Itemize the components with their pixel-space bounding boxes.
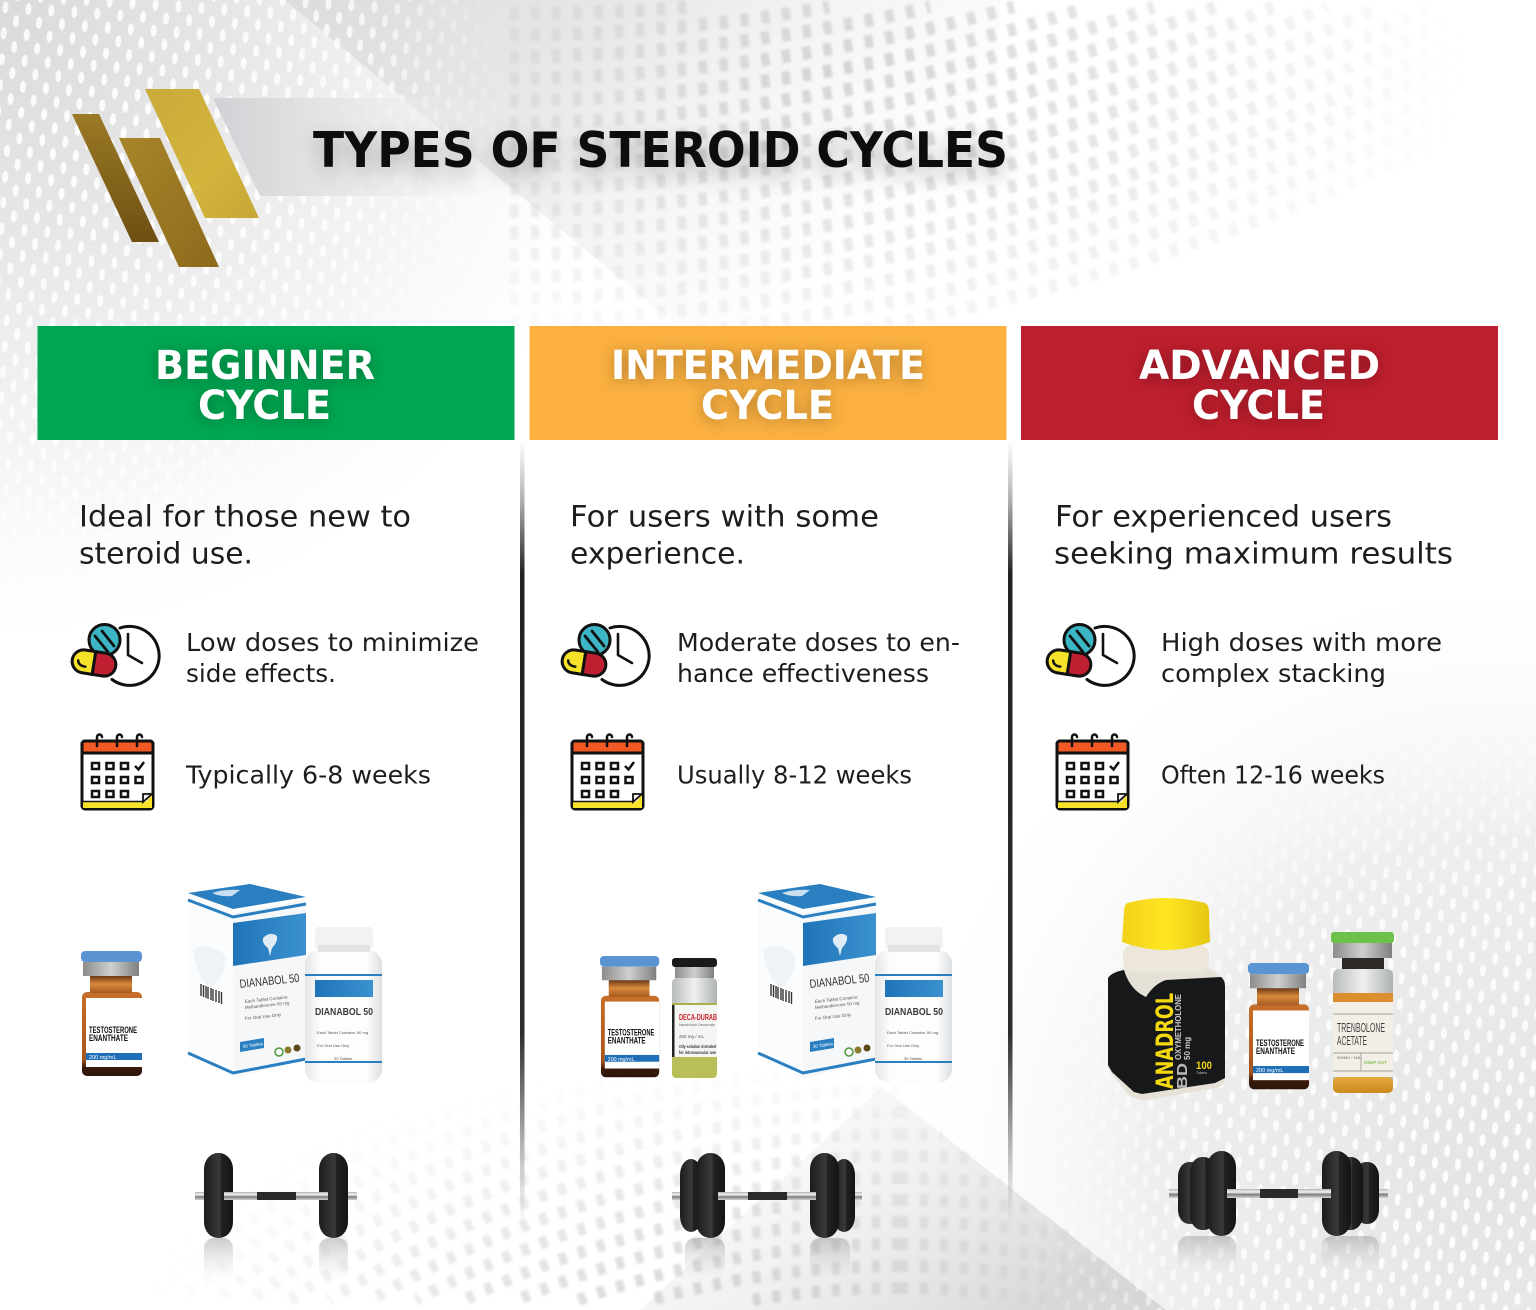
vial: testosterone enanthate	[81, 951, 142, 1076]
title banner band	[213, 98, 500, 196]
logo	[72, 89, 259, 267]
vial: testosterone enanthate: 200 mg/mL	[1256, 1068, 1283, 1074]
intro text: Ideal for those new to	[79, 500, 411, 534]
vial: testosterone enanthate: 200 mg/mL	[89, 1055, 117, 1061]
vial: deca-durabolin: Nandrolone Decanoate	[679, 1022, 716, 1027]
duration text: Often 12-16 weeks	[1161, 760, 1385, 790]
panel: intermediate header	[530, 326, 1006, 440]
bottle: anadrol: 100	[1196, 1060, 1212, 1072]
vial: testosterone enanthate: 200 mg/mL	[608, 1057, 634, 1063]
box: dianabol 50: Each Tablet Contains:	[815, 994, 859, 1004]
heading: advanced: ADVANCED	[1139, 343, 1380, 389]
icon: pills and clock	[1045, 624, 1134, 685]
intro text: For users with some	[570, 500, 879, 534]
heading: intermediate	[611, 343, 925, 429]
vial: deca-durabolin: 200 mg / mL	[679, 1034, 705, 1039]
vial: testosterone enanthate: ENANTHATE	[1256, 1046, 1295, 1056]
heading: beginner	[155, 343, 375, 429]
bottle: anadrol: BD	[1174, 1063, 1191, 1089]
vial: testosterone enanthate: ENANTHATE	[89, 1033, 128, 1043]
intro text: seeking maximum results	[1054, 536, 1453, 570]
title banner	[72, 89, 1008, 267]
vial: trenbolone acetate: ACETATE	[1337, 1033, 1367, 1048]
bottle: dianabol 50: 30 Tablets	[334, 1056, 352, 1061]
dose text: complex stacking	[1161, 659, 1386, 688]
icon: calendar	[82, 735, 153, 809]
vial: trenbolone acetate: 300MG / 1ML	[1337, 1055, 1362, 1060]
intro text	[570, 500, 879, 570]
icon: calendar	[572, 735, 643, 809]
box: dianabol 50: For Oral Use Only	[815, 1012, 852, 1021]
dose text: Low doses to minimize	[186, 628, 479, 657]
panel: beginner content	[70, 500, 479, 1280]
vial: deca-durabolin: Oily solution intended	[679, 1044, 716, 1049]
vial: testosterone enanthate: TESTOSTERONE	[1256, 1038, 1304, 1048]
vial: trenbolone acetate: KEEP OUT	[1364, 1060, 1387, 1065]
bottle: dianabol 50	[875, 927, 952, 1083]
dose text: High doses with more	[1161, 628, 1442, 657]
vial: trenbolone acetate: TRENBOLONE	[1337, 1020, 1385, 1035]
dose text	[186, 628, 479, 688]
panel: advanced content	[1045, 500, 1453, 1272]
bottle: anadrol: 50 mg	[1183, 1037, 1192, 1060]
vial: deca-durabolin: for intramuscular use	[679, 1050, 716, 1055]
intro text	[79, 500, 411, 570]
icon: pills and clock	[560, 624, 649, 685]
heading: advanced	[1139, 343, 1380, 429]
title: TYPES OF STEROID CYCLES	[313, 122, 1008, 179]
dose text: Moderate doses to en-	[677, 628, 960, 657]
box: dianabol 50	[758, 884, 876, 1079]
icon: pills and clock	[70, 624, 159, 685]
vial: testosterone enanthate: ENANTHATE	[608, 1035, 646, 1045]
bottle: anadrol: OXYMETHOLONE	[1174, 993, 1183, 1060]
heading: advanced: CYCLE	[1192, 383, 1325, 429]
dose text: side effects.	[186, 659, 336, 688]
intro text	[1054, 500, 1453, 570]
box: dianabol 50: Methandienone 50 mg	[815, 1000, 860, 1010]
heading: intermediate: INTERMEDIATE	[611, 343, 925, 389]
intro text: For experienced users	[1055, 500, 1392, 534]
bottle: dianabol 50: Each Tablet Contains: 50 mg	[887, 1030, 938, 1035]
panel: beginner header	[38, 326, 514, 440]
vial: testosterone enanthate	[1248, 963, 1309, 1089]
box: dianabol 50: DIANABOL 50	[809, 971, 870, 991]
duration text: Typically 6-8 weeks	[185, 760, 431, 790]
panel: intermediate content	[560, 500, 960, 1280]
bottle: anadrol: ANADROL	[1151, 993, 1179, 1089]
dose text: hance effectiveness	[677, 659, 929, 688]
column dividers	[520, 440, 1012, 1230]
bottle: anadrol: Tablets	[1196, 1071, 1207, 1075]
vial: testosterone enanthate	[600, 956, 659, 1077]
heading: beginner: BEGINNER	[155, 343, 375, 389]
box: dianabol 50: For Oral Use Only	[245, 1012, 282, 1021]
vial: testosterone enanthate: TESTOSTERONE	[608, 1028, 654, 1038]
duration text: Usually 8-12 weeks	[677, 760, 912, 790]
bottle: anadrol	[1108, 898, 1225, 1100]
bottle: dianabol 50: For Oral Use Only	[887, 1043, 919, 1048]
heading: beginner: CYCLE	[198, 383, 331, 429]
icon: calendar	[1057, 735, 1128, 809]
panel: advanced header	[1021, 326, 1498, 440]
heading: intermediate: CYCLE	[701, 383, 834, 429]
bottle: dianabol 50: For Oral Use Only	[317, 1043, 349, 1048]
dumbbell	[195, 1153, 357, 1280]
box: dianabol 50: Methandienone 50 mg	[245, 1000, 290, 1010]
box: dianabol 50: 30 Tablets	[242, 1041, 264, 1049]
vial: deca-durabolin: DECA-DURAB	[679, 1012, 717, 1022]
bottle: dianabol 50: Each Tablet Contains: 50 mg	[317, 1030, 368, 1035]
bottle: dianabol 50: DIANABOL 50	[885, 1007, 943, 1018]
dose text	[1161, 628, 1442, 688]
intro text: experience.	[570, 536, 745, 570]
vial: deca-durabolin	[672, 958, 717, 1078]
bottle: dianabol 50: 30 Tablets	[904, 1056, 922, 1061]
bottle: dianabol 50	[305, 927, 382, 1083]
box: dianabol 50: 30 Tablets	[812, 1041, 834, 1049]
box: dianabol 50	[188, 884, 306, 1079]
intro text: steroid use.	[79, 536, 253, 570]
box: dianabol 50: DIANABOL 50	[239, 971, 300, 991]
box: dianabol 50: Each Tablet Contains:	[245, 994, 289, 1004]
dumbbell	[1169, 1151, 1388, 1272]
bottle: dianabol 50: DIANABOL 50	[315, 1007, 373, 1018]
dose text	[677, 628, 960, 688]
dumbbell	[672, 1153, 862, 1280]
vial: testosterone enanthate: TESTOSTERONE	[89, 1025, 137, 1035]
vial: trenbolone acetate	[1331, 932, 1394, 1093]
